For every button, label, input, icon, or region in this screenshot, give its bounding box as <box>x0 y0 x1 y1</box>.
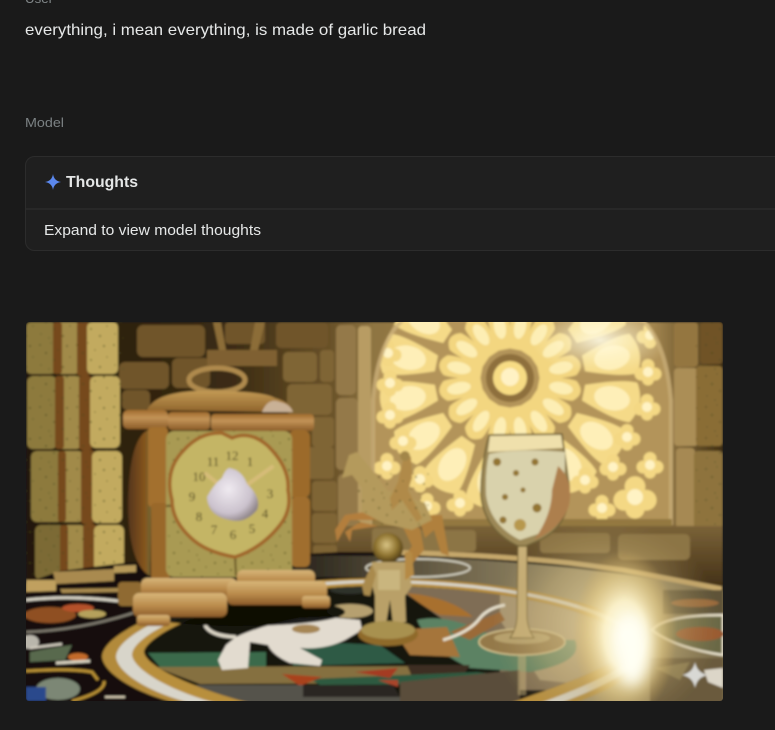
marble flecks <box>330 586 370 594</box>
garlic liquid <box>486 450 565 540</box>
window inner tier panes <box>438 322 582 440</box>
stone pillars right of window <box>674 322 723 544</box>
window frame <box>373 318 671 525</box>
bread astronaut figurine <box>358 533 418 646</box>
rose window <box>370 322 674 526</box>
tan band <box>155 666 470 684</box>
light glare on table <box>490 520 720 730</box>
thoughts heading: Thoughts <box>66 174 138 191</box>
oval inlay behind figure <box>366 559 470 577</box>
medallion inlay scene <box>146 586 609 701</box>
green inlay <box>148 652 266 667</box>
clock numerals: 10 <box>192 469 206 484</box>
bread crust in glass <box>534 466 570 540</box>
window outer tier panes <box>378 322 642 508</box>
user prompt text: everything, i mean everything, is made of garlic bread <box>25 22 426 39</box>
sill bricks under window <box>337 525 723 583</box>
icon: blue sparkle <box>45 174 61 190</box>
clock handle <box>189 368 245 392</box>
generated image: garlic bread room <box>26 322 723 701</box>
arch moulding <box>207 350 277 366</box>
glass foot <box>479 629 565 655</box>
marble table top <box>20 552 730 705</box>
clock body left crust <box>128 430 152 576</box>
rider <box>390 452 422 522</box>
clock body right crust <box>289 430 310 498</box>
figurine base <box>358 622 418 646</box>
icon: white sparkle watermark <box>682 662 708 688</box>
clock numerals: 11 <box>207 454 219 469</box>
astronaut helmet <box>373 533 403 563</box>
window top glow <box>540 322 658 370</box>
clock hands <box>203 465 274 486</box>
clock base slices <box>118 570 330 626</box>
stone wall of bread bricks <box>26 322 723 592</box>
glass rim highlight <box>488 435 563 452</box>
stacked garlic bread column <box>26 322 124 580</box>
clock numerals: 5 <box>249 521 255 536</box>
grey stone <box>196 684 304 701</box>
red accents <box>282 674 322 686</box>
panel: thoughts card <box>26 156 775 250</box>
horse rear legs <box>402 515 449 564</box>
clock numerals: 7 <box>211 522 218 537</box>
clock numerals: 1 <box>247 454 253 469</box>
clock shadow <box>168 600 346 627</box>
horse body and neck <box>342 452 432 530</box>
glass bowl <box>481 434 569 546</box>
clock numerals: 4 <box>262 506 269 521</box>
expand hint text: Expand to view model thoughts <box>44 223 261 239</box>
clock top plank <box>123 410 314 431</box>
gold and white medallion ring <box>102 578 650 705</box>
inlaid floral left <box>21 588 133 701</box>
window hub <box>486 354 534 402</box>
table rim of bread crusts <box>26 552 722 592</box>
inlaid white hound <box>205 604 373 670</box>
clock numerals: 12 <box>226 448 238 463</box>
astronaut suit <box>372 562 412 624</box>
clock back face <box>166 431 292 577</box>
clock numerals: 8 <box>196 509 202 524</box>
garlic bulb <box>207 468 258 521</box>
bread horse and rider figurine <box>335 451 449 564</box>
clock numerals: 9 <box>189 489 195 504</box>
clock top loaf <box>147 391 293 412</box>
clock numerals: 3 <box>267 486 273 501</box>
clock numerals: 6 <box>230 527 237 542</box>
clock numerals <box>189 448 273 542</box>
wine glass of garlic liquid <box>479 434 570 695</box>
model label: Model <box>25 115 64 130</box>
inlaid floral right <box>650 590 724 703</box>
clock dial <box>170 433 289 557</box>
glass stem <box>510 543 534 638</box>
outer trefoil glass panes <box>374 322 664 522</box>
bread clock <box>118 368 345 626</box>
horse front legs <box>335 512 380 542</box>
